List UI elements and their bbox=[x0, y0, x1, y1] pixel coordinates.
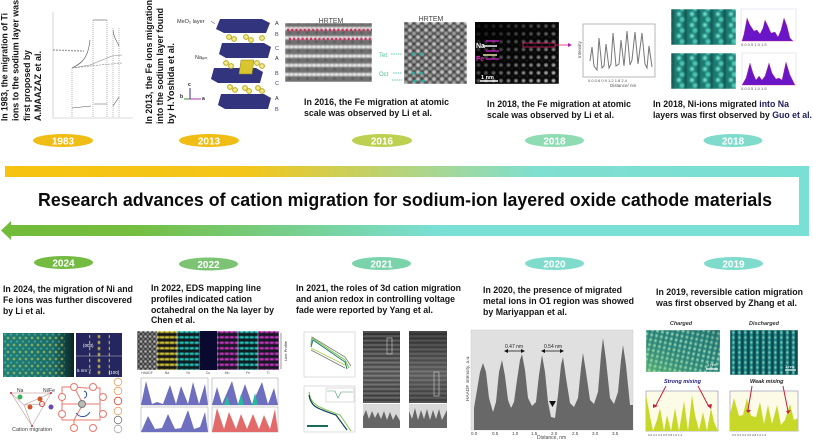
image: atomic map bbox=[3, 333, 74, 377]
image: EDS element maps: Line Profile bbox=[283, 340, 288, 361]
diagram: layered crystal structure: b bbox=[180, 94, 183, 100]
text: 2018 Fe description bbox=[487, 98, 631, 120]
ellipse: 2013: 2013 bbox=[198, 136, 221, 148]
image: diffraction bbox=[76, 333, 122, 377]
text: 2021 description: and anion redox in controlling voltage bbox=[296, 293, 455, 304]
chart: HAADF intensity: 1.5 bbox=[531, 431, 538, 436]
ellipse: 2020 bbox=[525, 257, 584, 270]
diagram: layered crystal structure: Naₐₙₜ bbox=[195, 55, 208, 61]
chart: weak mixing: 0.0 0.2 0.4 0.6 0.8 1.0 1.2 bbox=[732, 433, 767, 437]
text: 2024 description: Fe ions was further discovered bbox=[3, 294, 132, 305]
ellipse: 2024: 2024 bbox=[52, 258, 75, 270]
text: 1983 description: A.MAAZAZ et al. bbox=[32, 51, 43, 121]
ellipse: 1983 bbox=[33, 134, 93, 148]
chart: HAADF intensity: 0.0 bbox=[471, 431, 478, 436]
text: 2022 description: In 2022, EDS mapping line bbox=[151, 282, 261, 293]
text: 2013 description bbox=[143, 0, 176, 124]
chart: Cu profile bbox=[141, 407, 208, 432]
text: 2021 description: In 2021, the roles of 3d cation migration bbox=[296, 282, 461, 293]
text: 2020 description bbox=[483, 284, 634, 317]
text: 2018 Ni description: In 2018, Ni-ions migrated into Na bbox=[653, 98, 790, 109]
ellipse: 2021 bbox=[352, 257, 411, 270]
chart: voltage curves bottom bbox=[304, 386, 355, 432]
diagram: layered crystal structure: A bbox=[275, 96, 279, 102]
chart: HAADF intensity: 2.0 bbox=[551, 431, 558, 436]
chart: HAADF intensity: HAADF intensity, a.u. bbox=[465, 356, 471, 401]
chart: 1983 phase diagram bbox=[53, 12, 133, 118]
chart: strong mixing bbox=[646, 379, 718, 437]
image: EDS element maps: Na bbox=[165, 371, 169, 375]
diagram: octahedral site: Cation migration bbox=[12, 427, 52, 433]
text: 2022 description: Chen et al. bbox=[151, 314, 195, 325]
chart: purple profile bottom bbox=[741, 53, 796, 91]
image: discharged: 1 nm bbox=[785, 364, 795, 369]
panel: 2016 bbox=[285, 16, 467, 148]
image: atomic lattice bbox=[475, 22, 572, 84]
chart: intensity profile: Intensity bbox=[577, 40, 582, 58]
image: STEM column left bbox=[363, 331, 400, 403]
ellipse: 2016 bbox=[352, 134, 412, 148]
diagram: layered crystal structure: C bbox=[275, 46, 279, 52]
ellipse: 2018 second: 2018 bbox=[722, 136, 745, 148]
ellipse: 2018 second bbox=[704, 134, 762, 148]
chart: purple profile bottom: 0.0 0.5 1.0 1.5 bbox=[741, 86, 767, 91]
text: 2024 description: by Li et al. bbox=[3, 305, 45, 316]
text: 2019 description bbox=[655, 286, 803, 308]
diagram: octahedral site bbox=[10, 388, 55, 433]
chart: HAADF intensity: 1.0 bbox=[512, 431, 519, 436]
image: charged: Charged bbox=[670, 321, 693, 327]
image: EDS element maps: HAADF bbox=[141, 371, 153, 375]
image: charged bbox=[646, 321, 720, 372]
ellipse: 2019: 2019 bbox=[722, 260, 745, 270]
ellipse: 2019 bbox=[704, 257, 763, 270]
diagram: migration network bbox=[58, 384, 106, 432]
image: HRTEM left bbox=[285, 18, 372, 82]
text: 2022 description bbox=[151, 282, 275, 325]
image: teal STEM top bbox=[671, 9, 736, 45]
image: charged: 1 nm bbox=[707, 362, 717, 367]
ellipse: 2016: 2016 bbox=[371, 136, 394, 148]
text: 2019 description: was first observed by Zhang et al. bbox=[655, 297, 797, 308]
panel: 1983 bbox=[0, 0, 133, 148]
chart: line profile left bbox=[363, 404, 400, 428]
chart: intensity profile: Distance/ nm bbox=[610, 83, 637, 88]
text: 2022 description: octahedral on the Na layer by bbox=[151, 304, 275, 315]
chart: HAADF intensity bbox=[465, 330, 633, 441]
text: 2018 Fe description: scale was observed by Li et al. bbox=[487, 109, 614, 120]
text: 2013 description: by H.Yoshida et al. bbox=[165, 43, 176, 124]
chart: Mn profile bbox=[212, 407, 278, 432]
text: 2018 Fe description: In 2018, the Fe migration at atomic bbox=[487, 98, 631, 109]
text: 2024 description: In 2024, the migration of Ni and bbox=[3, 283, 133, 294]
image: HRTEM right: Tet bbox=[379, 53, 387, 59]
text: 2016 description: scale was observed by Li et al. bbox=[304, 107, 432, 118]
panel: 2013 bbox=[143, 0, 279, 148]
ellipse: 2021: 2021 bbox=[370, 260, 393, 270]
image: HRTEM right bbox=[379, 16, 467, 84]
text: 2016 description bbox=[304, 96, 449, 118]
diagram: layered crystal structure: a bbox=[202, 96, 205, 102]
image: atomic lattice: Fe bbox=[476, 56, 484, 63]
timeline arrow bbox=[5, 166, 809, 236]
chart: HAADF intensity: 3.5 bbox=[612, 431, 619, 436]
text: 2021 description bbox=[296, 282, 461, 315]
text: 2020 description: metal ions in O1 region was showed bbox=[483, 295, 634, 306]
chart: strong mixing: Strong mixing bbox=[664, 379, 702, 385]
text: 2022 description: profiles indicated cation bbox=[151, 293, 252, 304]
image: HRTEM left: HRTEM bbox=[319, 18, 344, 25]
ellipse: 2018 bbox=[525, 134, 584, 148]
chart: Fe profile bbox=[212, 378, 278, 405]
chart: weak mixing: Weak mixing bbox=[750, 379, 784, 385]
diagram: layered crystal structure: B bbox=[275, 32, 279, 38]
text: 2020 description: In 2020, the presence of migrated bbox=[483, 284, 622, 295]
chart: purple profile top bbox=[741, 9, 796, 47]
chart: HAADF intensity: 3.0 bbox=[592, 431, 599, 436]
chart: HAADF intensity: 0.5 bbox=[492, 431, 499, 436]
chart: intensity profile bbox=[577, 24, 655, 88]
image: discharged: Discharged bbox=[749, 321, 780, 327]
text: 1983 description bbox=[0, 0, 43, 121]
chart: strong mixing: 0.0 0.2 0.4 0.6 0.8 1.0 1.2 bbox=[648, 433, 683, 437]
image: EDS element maps: Ni bbox=[186, 371, 190, 375]
chart: HAADF intensity: Distance, nm bbox=[537, 435, 566, 441]
chart: HAADF intensity: 0.54 nm bbox=[544, 344, 562, 350]
ellipse: 2020: 2020 bbox=[543, 260, 566, 270]
image: diffraction: (003) bbox=[83, 343, 94, 348]
ellipse: 1983: 1983 bbox=[52, 136, 75, 148]
diagram: layered crystal structure: C bbox=[275, 81, 279, 87]
text: 2024 description bbox=[3, 283, 133, 316]
chart: HAADF intensity: 0.47 nm bbox=[505, 344, 523, 350]
ellipse: 2022: 2022 bbox=[197, 260, 220, 271]
panel: 2024 bbox=[3, 283, 133, 433]
text: 2018 Ni description: layers was first observed by Guo et al. bbox=[653, 109, 812, 120]
diagram: layered crystal structure: A bbox=[275, 56, 279, 62]
ellipse: 2022 bbox=[179, 258, 238, 271]
text: 2018 Ni description bbox=[653, 98, 812, 120]
panel: 2018 Ni bbox=[653, 9, 812, 148]
chart: line profile right bbox=[409, 404, 447, 428]
image: HRTEM right: Oct bbox=[379, 72, 389, 78]
image: atomic lattice: Na bbox=[476, 43, 485, 50]
image: diffraction: [100] bbox=[109, 370, 119, 375]
panel: 2018 Fe bbox=[475, 22, 655, 148]
text: 2019 description: In 2019, reversible cation migration bbox=[656, 286, 803, 297]
text: 2013 description: into the sodium layer found bbox=[154, 8, 165, 124]
text: 2021 description: fade were reported by Yang et al. bbox=[296, 304, 433, 315]
panel: 2020 bbox=[465, 284, 634, 441]
title: Research advances of cation migration for sodium-ion layered oxide cathode materials bbox=[38, 190, 772, 210]
ellipse: 2024 bbox=[34, 256, 93, 270]
diagram: layered crystal structure: A bbox=[275, 21, 279, 27]
text: 1983 description: first proposed by bbox=[21, 49, 32, 121]
diagram: layered crystal structure: c bbox=[188, 82, 191, 88]
diagram: layered crystal structure: MeO₂ layer bbox=[177, 19, 205, 25]
diagram: layered crystal structure: B bbox=[275, 71, 279, 77]
image: EDS element maps: Fe bbox=[246, 371, 250, 375]
image: EDS element maps bbox=[137, 331, 288, 375]
text: 2016 description: In 2016, the Fe migration at atomic bbox=[304, 96, 449, 107]
diagram: octahedral site: Ni/Fe bbox=[43, 388, 55, 394]
diagram: layered crystal structure: B bbox=[275, 107, 279, 113]
image: EDS element maps: Cu bbox=[206, 371, 210, 375]
image: EDS element maps: Mn bbox=[225, 371, 229, 375]
image: STEM column right bbox=[409, 331, 447, 403]
diagram: octahedral site: Na bbox=[17, 388, 24, 394]
image: teal STEM bottom bbox=[671, 53, 736, 89]
panel: 2019 bbox=[646, 286, 803, 437]
chart: Ni profile bbox=[141, 378, 208, 405]
diagram: layered crystal structure bbox=[177, 19, 279, 113]
chart: HAADF intensity: 2.5 bbox=[572, 431, 579, 436]
chart: purple profile top: 0.0 0.5 1.0 1.5 bbox=[741, 42, 767, 47]
image: atomic lattice: 1 nm bbox=[481, 75, 494, 81]
chart: intensity profile: 0.0 0.6 0.9 1.2 1.8 2.4 bbox=[588, 78, 628, 83]
panel: 2022 bbox=[137, 282, 288, 432]
image: EDS element maps: Ti bbox=[267, 371, 270, 375]
legend: ion types bbox=[114, 378, 122, 433]
panel: 2021 bbox=[296, 282, 461, 432]
chart: weak mixing bbox=[730, 379, 798, 437]
timeline lower arrow bbox=[1, 221, 800, 240]
chart: voltage curves top bbox=[304, 332, 355, 377]
text: 2020 description: by Mariyappan et al. bbox=[483, 306, 567, 317]
image: discharged bbox=[730, 321, 798, 375]
ellipse: 2013 bbox=[179, 134, 239, 148]
image: HRTEM right: HRTEM bbox=[419, 16, 444, 23]
ellipse: 2018: 2018 bbox=[543, 136, 566, 148]
image: diffraction: 5 nm⁻¹ bbox=[77, 368, 91, 373]
